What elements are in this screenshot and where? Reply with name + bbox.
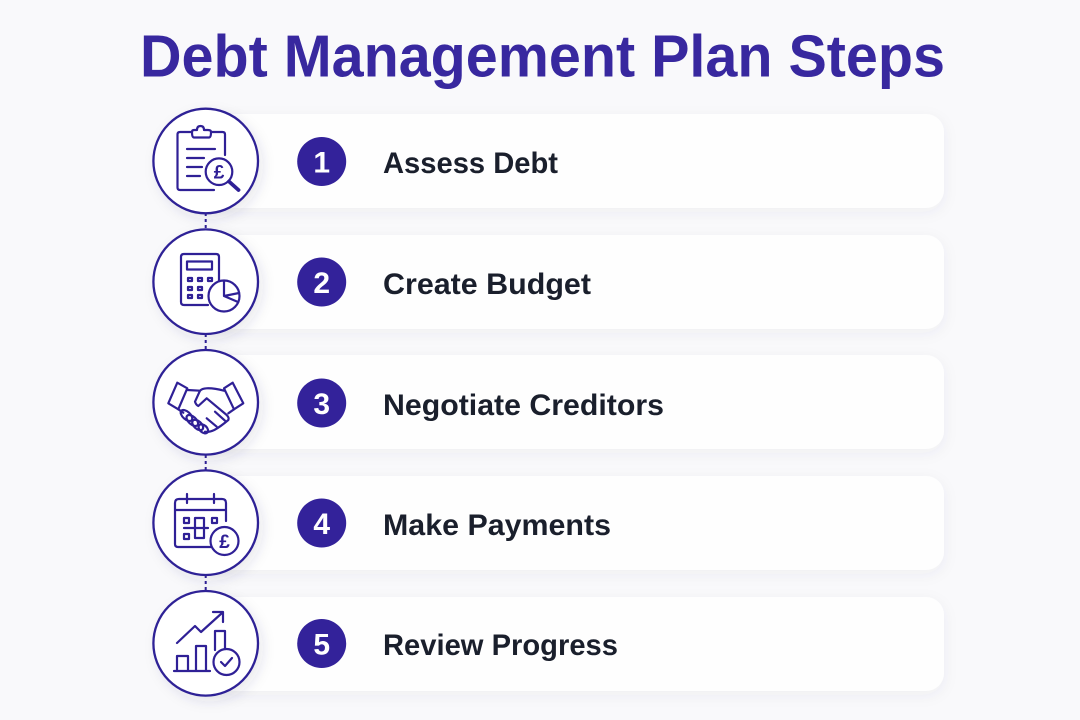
number badge 3 [297,378,346,428]
icon: handshake [153,350,258,455]
number badge 3: 3 [313,388,330,421]
icon: calendar with pound coin: £ [219,532,230,553]
number badge 1 [297,137,346,186]
connector: dotted line between step circles [205,213,207,591]
label: Assess Debt: Assess Debt [383,147,558,180]
number badge 4: 4 [313,508,330,541]
number badge 5 [297,619,346,668]
icon: calculator with pie chart [153,229,258,334]
title: Debt Management Plan Steps [140,22,945,90]
panel: step 1 [153,109,944,213]
panel: step 4 [153,470,944,575]
label: Create Budget: Create Budget [383,268,591,301]
card: step 5 background [215,597,944,691]
number badge 4 [297,498,346,548]
card: step 4 background [215,476,944,570]
panel: step 5 [153,591,944,696]
icon: calendar with pound coin [153,470,258,575]
number badge 2 [297,258,346,306]
icon: clipboard with pound magnifier [153,109,258,213]
number badge 1: 1 [313,146,330,180]
label: Make Payments: Make Payments [383,509,611,542]
card: step 2 background [215,235,944,329]
panel: step 2 [153,229,944,334]
icon: clipboard with pound magnifier: £ [214,162,225,184]
number badge 5: 5 [313,628,330,662]
label: Review Progress: Review Progress [383,629,618,662]
number badge 2: 2 [313,267,330,300]
icon: growth chart with check [153,591,258,696]
panel: step 3 [153,350,944,455]
label: Negotiate Creditors: Negotiate Creditors [383,389,664,422]
card: step 3 background [215,355,944,449]
card: step 1 background [215,114,944,208]
